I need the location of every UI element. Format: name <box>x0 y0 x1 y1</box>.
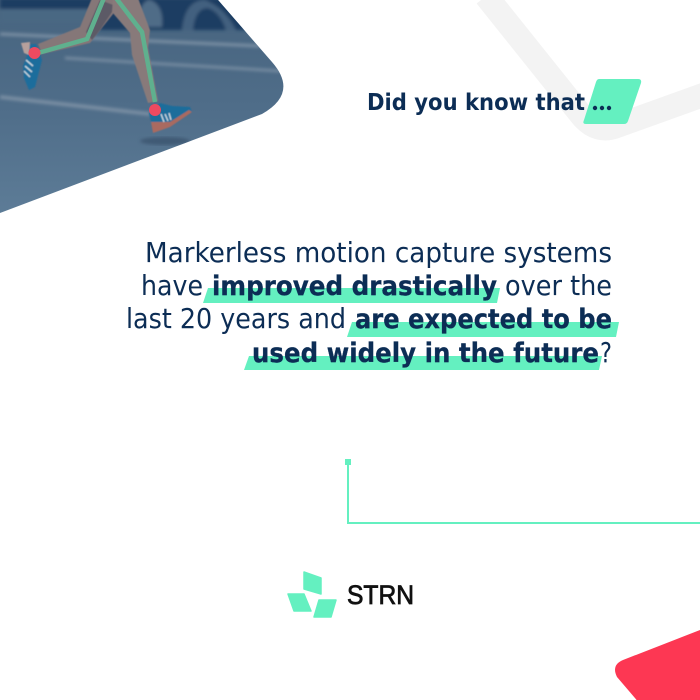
red corner shape <box>615 630 700 700</box>
heading dots <box>593 106 611 110</box>
heading highlight <box>583 79 641 124</box>
line 2: over the <box>505 270 612 302</box>
heading text: Did you know that <box>367 88 585 116</box>
line 4: ? <box>600 337 612 369</box>
line 3: last 20 years and <box>126 303 346 335</box>
line 1: Markerless motion capture systems <box>145 237 612 269</box>
line 2: improved drastically <box>212 271 497 302</box>
road shadow <box>140 137 190 145</box>
legs <box>21 0 192 133</box>
logo: STRN <box>288 572 414 617</box>
connector line <box>345 459 700 524</box>
capture skeleton <box>38 0 155 102</box>
road lines <box>0 34 280 114</box>
heading: did you know that <box>367 79 641 124</box>
highlight: used widely in the future <box>244 356 602 370</box>
photo: runner with motion capture overlay <box>0 0 300 215</box>
road background <box>0 0 300 215</box>
main statement <box>126 237 619 370</box>
logo wordmark: STRN <box>347 580 414 610</box>
decorative grey chevron line <box>486 0 700 128</box>
highlight: improved drastically <box>203 288 500 303</box>
capture joints <box>28 47 161 116</box>
blurred background band <box>0 0 246 32</box>
line 2: have <box>141 270 203 302</box>
line 2 <box>141 270 612 302</box>
line 3 <box>126 303 612 335</box>
logo mark <box>288 572 336 617</box>
line 4: used widely in the future <box>252 338 599 369</box>
highlight: are expected to be <box>347 322 619 337</box>
line 3: are expected to be <box>355 304 612 335</box>
front shoe <box>148 102 192 122</box>
rear shoe <box>23 44 42 90</box>
